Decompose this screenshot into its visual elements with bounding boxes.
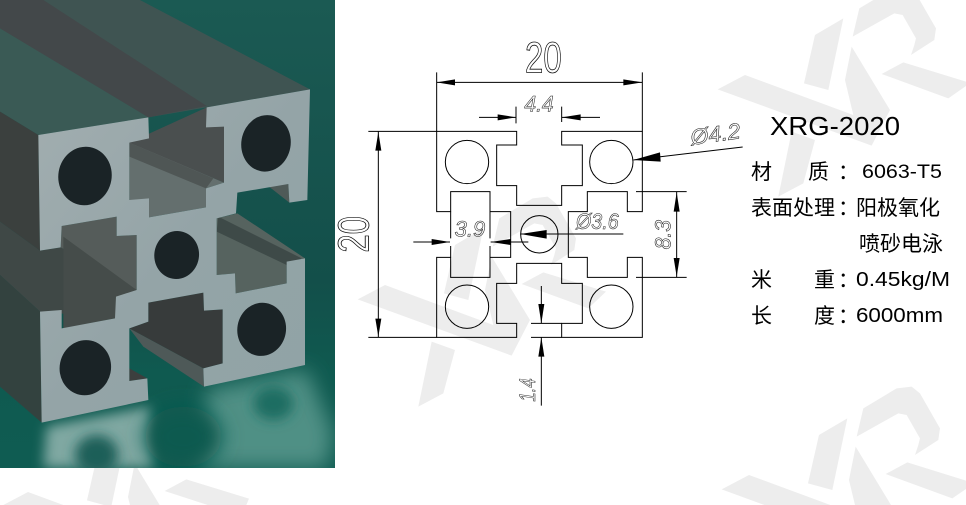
- spec: material: [751, 161, 942, 184]
- dimension: slot width 4.4: [479, 91, 600, 123]
- spec: material: 6063-T5: [862, 162, 942, 183]
- spec: surface treatment: 阳极氧化: [856, 197, 940, 220]
- dimension: overall height 20: 20: [330, 216, 378, 253]
- spec: weight per metre: [751, 269, 950, 292]
- spec: surface treatment: ：: [838, 197, 859, 220]
- dimension: 1.4: 1.4: [515, 378, 540, 402]
- cross-section drawing: [330, 34, 743, 406]
- spec: length: [751, 305, 943, 328]
- dimension: 3.9: [413, 212, 528, 257]
- dimension: diameter 4.2: [633, 118, 743, 162]
- dimension: slot width 4.4: 4.4: [524, 91, 554, 116]
- spec: weight per metre: ：: [838, 269, 859, 292]
- dimension: overall width 20: 20: [525, 34, 562, 82]
- spec: surface treatment: 表面处理: [751, 197, 835, 220]
- dimension: 8.3: [636, 192, 687, 277]
- dimension: diameter 3.6: [520, 209, 623, 239]
- dimension: diameter 4.2: Ø4.2: [688, 118, 742, 150]
- spec: surface treatment: [751, 197, 940, 220]
- spec: weight per metre: 米: [751, 269, 772, 292]
- spec: length: ：: [838, 305, 859, 328]
- dimension: diameter 3.6: Ø3.6: [575, 209, 619, 234]
- photo: aluminium profile: [0, 0, 335, 475]
- spec: surface treatment line 2: 喷砂电泳: [859, 233, 943, 256]
- specification list: [751, 161, 950, 328]
- profile outline: [437, 131, 642, 337]
- dimension: 1.4: [515, 286, 562, 406]
- circles: holes: [445, 140, 633, 328]
- spec: length: 6000mm: [856, 305, 943, 327]
- title: XRG-2020: [770, 111, 900, 141]
- spec: material: ：: [838, 161, 859, 184]
- spec: length: 长: [751, 305, 772, 328]
- spec: length: 度: [814, 305, 835, 328]
- spec: weight per metre: 重: [814, 269, 835, 292]
- dimension: overall width 20: [437, 34, 642, 131]
- spec: material: 材: [751, 161, 772, 184]
- spec: material: 质: [808, 161, 829, 184]
- spec: weight per metre: 0.45kg/M: [856, 269, 950, 291]
- dimension: overall height 20: [330, 131, 437, 337]
- dimension: 3.9: 3.9: [455, 217, 485, 242]
- dimension: 8.3: 8.3: [651, 219, 676, 249]
